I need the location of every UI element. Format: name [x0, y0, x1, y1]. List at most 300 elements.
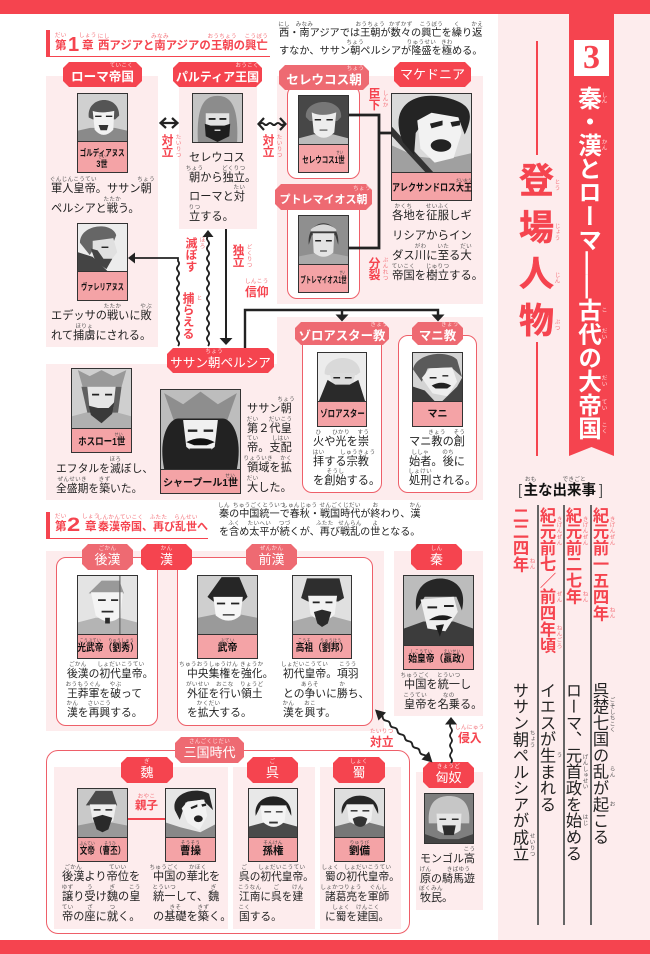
panel: Sasanian figures and religions	[46, 317, 483, 500]
text: Emperor Wu: かくだい	[197, 701, 220, 707]
text: Alexander	[392, 203, 483, 282]
badge: Three Kingdoms period: さんごくじだい	[189, 738, 230, 744]
portrait: Khosrow I	[71, 368, 132, 453]
badge: Shu	[333, 757, 385, 783]
text: Emperor Wen: ごかん	[64, 865, 82, 871]
chapter 1 intro text: きわ	[441, 40, 453, 46]
badge: Wei: ぎ	[144, 758, 150, 764]
text: Emperor Wen: う	[87, 885, 93, 891]
text: Parthia: 朝から独立。	[189, 172, 256, 184]
text: Emperor Wu: きょうか	[240, 662, 264, 668]
badge: Seleucid dynasty: セレウコス	[286, 73, 349, 87]
text: しんにゅう	[455, 725, 485, 731]
text: Mani: しょけい	[408, 469, 432, 475]
text: Sun Quan: けん	[292, 885, 304, 891]
portrait: Emperor Guangwu	[77, 575, 138, 659]
heading: chapter 1: 章	[82, 39, 94, 52]
badge: Shu: しょく	[350, 758, 368, 764]
portrait: Khosrow I: せい	[114, 432, 123, 436]
text: Liu Bei: ぐんし	[370, 885, 387, 891]
arrow: Parthia versus Seleucids	[258, 118, 286, 130]
event: 27 BC: ローマ、 元首政 を 始 める	[563, 682, 581, 861]
portrait: Ptolemy I	[298, 215, 349, 293]
arrow: faith lines to religions	[245, 310, 444, 348]
portrait: Shapur I: せい	[225, 472, 235, 478]
portrait: Emperor Gaozu: 高祖（劉邦）	[296, 642, 348, 654]
text: Emperor Wen: つ	[109, 905, 115, 911]
badge: Han: 漢	[160, 552, 173, 566]
text: Mani: 始者。後に	[409, 456, 465, 468]
panel: sidebar: せいりつ	[528, 833, 534, 857]
text: Parthia: セレウコス	[189, 152, 245, 164]
text: Emperor Gaozu: あらそ	[301, 682, 319, 688]
text: Emperor Guangwu: しょだいこうてい	[97, 662, 145, 668]
badge: Qin: しん	[431, 546, 442, 552]
arrow: independence from Seleucids	[220, 229, 232, 345]
chapter 1 intro text: にし	[278, 22, 290, 28]
portrait: Emperor Wen	[77, 788, 128, 862]
badge: Zoroastrianism: 教	[373, 329, 385, 343]
badge: Parthia: 王国	[235, 70, 259, 84]
event: 7 to 4 BC: 紀元前 七／ 前 四 年頃	[537, 507, 555, 654]
link: parent and child	[128, 793, 165, 820]
badge: Xiongnu	[423, 762, 474, 788]
portrait: Ptolemy I: プトレマイオス1世	[300, 274, 347, 284]
portrait: Emperor Gaozu: こうそ	[298, 638, 311, 642]
text: Xiongnu: こう	[464, 847, 475, 853]
panel: Parthia	[173, 62, 262, 229]
badge: Ptolemaic dynasty: ちょう	[353, 186, 371, 192]
text: Khosrow I: エフタルを滅ぼし、	[56, 463, 153, 475]
chapter 2 intro text: しん	[218, 503, 230, 509]
text: Liu Bei: 諸葛亮を軍師	[325, 891, 389, 903]
heading: chapter 2: ふたた	[150, 515, 167, 521]
badge: Han: かん	[161, 546, 172, 552]
text: Emperor Wen: 譲り受け魏の皇	[62, 891, 140, 903]
badge: Wei: 魏	[140, 764, 154, 780]
text: Zoroaster: を創始する。	[313, 475, 380, 487]
portrait: Gordian III: せい	[99, 154, 106, 158]
label: split	[367, 257, 388, 281]
text: Alexander: 帝国を樹立する。	[392, 270, 483, 282]
heading: chapter 2: 第	[55, 520, 67, 533]
box: Later Han	[56, 557, 158, 726]
label: destroy	[184, 237, 205, 272]
text: Shapur I: ササン朝	[247, 403, 292, 415]
label: conflict 1	[160, 134, 181, 158]
chapter 2 intro text: 秦の中国統一で春秋・戦国時代が終わり、漢	[219, 509, 420, 520]
panel: Qin dynasty	[394, 544, 483, 716]
panel: Seleucids, Ptolemies and Macedonia	[275, 62, 483, 304]
portrait: Alexander the Great: アレクサンドロス大王	[392, 182, 472, 194]
panel: sidebar: う	[556, 752, 562, 758]
arrow: Sasanians destroy Parthia	[202, 230, 214, 346]
text: Valerian: ほりょ	[75, 324, 93, 330]
portrait: Liu Bei: りゅうび	[350, 840, 369, 844]
heading: chapter 2: だい	[55, 514, 67, 520]
heading: chapter 1: こうぼう	[245, 34, 268, 40]
portrait: First Emperor: 始皇帝（嬴政）	[408, 654, 469, 664]
chapter 1 intro text: ちょう	[346, 40, 364, 46]
text: Alexander: せいふく	[426, 204, 449, 210]
chapter 2 intro text: ちゅうごくとういつ	[233, 503, 286, 509]
badge: Zoroastrianism: ゾロアスター	[299, 329, 373, 343]
text: Alexander: いた	[437, 244, 449, 250]
text: Xiongnu: きばゆう	[447, 867, 470, 873]
badge: Wu: 呉	[266, 764, 279, 780]
portrait: Seleucus I	[298, 95, 349, 173]
portrait: Emperor Guangwu: 光武帝（劉秀）	[77, 642, 138, 654]
chapter 2 intro text: よ	[372, 521, 378, 527]
text: Khosrow I: きず	[99, 477, 110, 483]
text: Shapur I: しはい	[272, 436, 289, 442]
text: Cao Cao	[149, 864, 231, 923]
text: Shapur I: だい	[247, 417, 258, 423]
text: Cao Cao: ぎ	[211, 885, 217, 891]
chapter 1 intro text: かえ	[471, 22, 483, 28]
panel: Xiongnu	[416, 762, 483, 910]
text: Emperor Guangwu: さいこう	[88, 701, 111, 707]
badge: Macedonia: マケドニア	[400, 66, 465, 82]
text: Zoroaster: ひ	[316, 430, 322, 436]
text: Mani	[408, 429, 476, 487]
text: Emperor Gaozu: 初代皇帝。項羽	[283, 668, 359, 680]
text: Valerian: やぶ	[140, 304, 152, 310]
badge: Wu: ご	[270, 758, 275, 764]
text: Emperor Wu	[179, 661, 273, 719]
text: Liu Bei: しょく	[332, 905, 350, 911]
box: Zoroastrianism	[302, 335, 382, 493]
badge: Parthia: パルティア	[176, 70, 235, 84]
panel: sidebar: きげんぜん	[608, 517, 614, 546]
text: Emperor Gaozu: との争いに勝ち、	[283, 688, 369, 700]
text: Alexander: ダス川に至る大	[392, 250, 472, 262]
text: Mani: そう	[453, 430, 465, 436]
badge: Xiongnu: きょうど	[437, 764, 460, 770]
badge: Manichaeism: マニ	[419, 329, 444, 343]
label: conflict 2	[261, 134, 282, 158]
text: Cao Cao: とういつ	[152, 885, 176, 891]
text: Emperor Wen: 帝の座に就く。	[62, 911, 140, 923]
text: Emperor Gaozu: 漢を興す。	[283, 707, 336, 719]
heading: chapter 1: 西アジアと南アジアの王朝の興亡	[98, 40, 268, 52]
text: Emperor Guangwu: かん	[66, 701, 78, 707]
portrait: Emperor Wen: 文帝（曹丕）	[80, 846, 125, 856]
panel: sidebar: げんしゅせい	[582, 754, 588, 789]
chapter 1 intro text: みなみ	[296, 22, 313, 28]
badge: Former Han: ぜんかん	[260, 546, 283, 552]
text: たいりつ	[370, 729, 394, 735]
text: Valerian	[51, 303, 152, 342]
portrait: Liu Bei: 劉備	[349, 844, 370, 856]
portrait: Shapur I	[160, 389, 241, 494]
chapter 1 intro text: 西・南アジアでは王朝が数々の興亡を繰り返	[279, 28, 482, 39]
text: Liu Bei: しょかつりょう	[320, 885, 362, 891]
chapter title text	[578, 86, 608, 440]
badge: Parthia: おうこく	[235, 63, 259, 69]
label: faith	[245, 278, 269, 299]
badge: Roman Empire: ていこく	[110, 63, 133, 69]
text: Shapur I: りょういき	[243, 456, 273, 462]
text: Zoroaster: しゅうきょう	[340, 450, 375, 456]
text: Alexander: かくち	[395, 204, 412, 210]
chapter 1 intro text: く	[454, 22, 460, 28]
badge: Zoroastrianism	[295, 322, 389, 345]
panel: Han dynasty	[46, 544, 384, 731]
event: 154 BC: 紀元前 一五四 年	[590, 507, 608, 621]
text: First Emperor: なの	[443, 693, 455, 699]
heading: chapter 1: だい	[55, 33, 67, 39]
box: Ptolemaic dynasty	[287, 190, 360, 299]
text: Alexander: リシアからイン	[392, 230, 472, 242]
portrait: Emperor Wen: ぶんてい	[80, 840, 95, 846]
badge: Seleucid dynasty: ちょう	[347, 66, 364, 72]
portrait: Gordian III	[77, 93, 128, 173]
heading: main events	[518, 476, 603, 499]
text: Khosrow I: ぜんせいき	[57, 477, 87, 483]
text: Khosrow I: 全盛期を築いた。	[56, 483, 142, 495]
portrait: First Emperor: しこうてい	[410, 648, 432, 654]
chapter 1 intro text: かずかず	[389, 22, 413, 28]
badge: Ptolemaic dynasty: 朝	[356, 194, 368, 206]
ribbon: chapter title: だい	[600, 375, 606, 387]
text: Alexander: がわ	[415, 244, 426, 250]
badge: Later Han: ごかん	[99, 546, 116, 552]
chapter number	[574, 40, 609, 76]
label: capture	[181, 292, 202, 339]
text: どくりつ	[246, 244, 252, 268]
event: 7 to 4 BC	[537, 507, 562, 812]
portrait: Shapur I: シャープール1世	[163, 478, 238, 488]
badge: Sasanian Persia: ササン ペルシア	[170, 356, 271, 370]
text: Gordian III: ペルシアと戦う。	[51, 203, 140, 215]
text: Cao Cao: 統一して、魏	[153, 891, 219, 903]
event: 154 BC: 呉楚七国 の 乱 が 起 こる	[590, 682, 608, 845]
text: Alexander: ていこく	[392, 264, 415, 270]
text: First Emperor	[400, 672, 482, 711]
text: Zoroaster: ひかり	[332, 430, 350, 436]
text: Valerian: たたか	[104, 304, 121, 310]
text: Cao Cao: かほく	[189, 865, 207, 871]
chapter 1 intro text: こうぼう	[420, 22, 443, 28]
text: Parthia: ちょう	[186, 166, 203, 172]
panel: sidebar: らん	[608, 766, 614, 778]
panel: sidebar: きげんぜん	[556, 517, 562, 546]
text: Emperor Guangwu: やぶ	[110, 682, 121, 688]
event: AD 224: 二二四 年	[510, 507, 528, 572]
text: Emperor Wen: ざ	[87, 905, 93, 911]
text: Emperor Wu: 外征を行い領土	[187, 688, 263, 700]
box: Seleucid dynasty	[287, 85, 360, 179]
panel: sidebar: ごそしちこく	[608, 697, 614, 732]
chapter title text: 秦 ・ 漢 とローマ—— 古 代 の 大 帝 国	[574, 86, 600, 440]
text: Khosrow I: ほろ	[109, 457, 121, 463]
heading: characters: じょう	[554, 223, 560, 241]
arrow: Xiongnu invade Qin	[445, 717, 457, 763]
portrait: Emperor Wu	[197, 575, 258, 659]
text: Sun Quan: 呉の初代皇帝。	[239, 871, 314, 883]
portrait: Cao Cao	[165, 788, 216, 862]
badge: Ptolemaic dynasty	[275, 184, 372, 210]
text: Sun Quan: こく	[238, 905, 250, 911]
portrait: Emperor Wen: そうひ	[104, 840, 116, 846]
heading: chapter 2: らんせい	[174, 515, 198, 521]
portrait: Emperor Gaozu	[292, 575, 352, 659]
heading: chapter 1: にし	[98, 34, 110, 40]
portrait: Emperor Wu: ぶてい	[220, 638, 235, 642]
text: と	[196, 295, 202, 301]
heading: chapter 1: おうちょう	[207, 34, 237, 40]
badge: Zoroastrianism: きょう	[370, 322, 388, 328]
portrait: Emperor Guangwu: りゅうしゅう	[108, 638, 134, 642]
label: vassals: 臣下	[367, 87, 381, 111]
event: AD 224: ササン 朝 ペルシアが 成立	[510, 682, 528, 861]
text: Valerian: エデッサの戦いに敗	[51, 310, 152, 322]
panel: sidebar: ねんごろ	[556, 626, 562, 649]
panel: Three Kingdoms	[46, 737, 410, 934]
text: Parthia: ローマと対	[189, 191, 245, 203]
text: First Emperor: とういつ	[437, 673, 461, 679]
connector: Alexander to successors	[349, 115, 392, 248]
text: Parthia: りつ	[189, 205, 201, 211]
text: Sun Quan	[238, 864, 314, 923]
text: First Emperor: 中国を統一し	[404, 679, 471, 691]
badge: Shu: 蜀	[352, 764, 366, 780]
heading: chapter 2: しんかんていこく	[97, 515, 143, 521]
chapter 2 intro text: せんごくじだい	[319, 503, 361, 509]
chapter 2 intro text: せんらん	[338, 521, 362, 527]
portrait: Sun Quan: そんけん	[263, 840, 283, 844]
text: Emperor Wen: てい	[62, 905, 73, 911]
text: Cao Cao: の基礎を築く。	[153, 911, 231, 923]
badge: Wu	[247, 757, 298, 783]
heading: characters: ぶつ	[554, 319, 560, 331]
text: Gordian III: たたか	[103, 197, 121, 203]
panel: sidebar: ちょう	[528, 730, 534, 748]
text: First Emperor: ちゅうごく	[400, 673, 430, 679]
label: conflict 3: 対立	[370, 735, 394, 749]
event: 27 BC	[563, 507, 588, 861]
badge: Manichaeism	[412, 322, 463, 345]
badge: Han	[141, 544, 192, 570]
chapter 2 intro text: たいへい	[248, 521, 271, 527]
chapter 2 intro text: お	[372, 503, 378, 509]
text: Emperor Guangwu: 漢を再興する。	[67, 707, 143, 719]
label: faith: 信仰	[245, 285, 269, 299]
event: 27 BC: 紀元前 二七 年	[563, 507, 581, 605]
portrait: Xiongnu horseman	[424, 793, 474, 844]
label: invasion	[455, 724, 485, 745]
text: Xiongnu: モンゴル高	[420, 853, 475, 865]
heading: chapter 1	[46, 30, 270, 57]
badge: Later Han: 後漢	[94, 552, 120, 566]
badge: Roman Empire: 帝国	[109, 70, 134, 84]
portrait: First Emperor: えいせい	[443, 648, 460, 654]
text: Emperor Gaozu: かん	[282, 701, 294, 707]
text: Parthia: どくりつ	[222, 166, 246, 172]
text: Mani: マニ教の創	[409, 436, 465, 448]
panel: sidebar: おも	[525, 477, 537, 483]
badge: Ptolemaic dynasty: プトレマイオス	[280, 194, 356, 206]
heading: chapter 1: 第	[55, 39, 67, 52]
badge: Manichaeism: きょう	[441, 322, 459, 328]
event: 7 to 4 BC: イエスが 生 まれる	[537, 682, 555, 812]
chapter 2 intro text: ふく	[228, 521, 240, 527]
ribbon: chapter title: だい	[600, 328, 606, 340]
portrait: Emperor Guangwu: こうぶてい	[79, 638, 101, 642]
text: Xiongnu: げん	[420, 867, 431, 873]
heading: chapter 1: みなみ	[151, 34, 169, 40]
text: Cao Cao: きず	[197, 905, 209, 911]
ribbon: chapter title: こく	[600, 422, 606, 434]
heading: chapter 2: 2	[67, 515, 80, 536]
label: conflict 1: 対立	[160, 134, 174, 158]
box: Former Han	[177, 557, 373, 726]
ribbon: chapter title: かん	[600, 139, 606, 151]
text: Valerian: れて捕虜にされる。	[51, 330, 151, 342]
ribbon: chapter title: こ	[600, 307, 606, 313]
text: Emperor Wen: 後漢より帝位を	[62, 871, 140, 883]
text: Sun Quan: 国する。	[239, 911, 282, 923]
text: Mani: きょう	[428, 430, 446, 436]
text: Zoroaster	[313, 429, 380, 487]
badge: Later Han	[82, 544, 133, 570]
portrait: Seleucus I: セレウコス1世	[302, 154, 345, 164]
text: Xiongnu	[419, 846, 475, 904]
text: Liu Bei: けんこく	[356, 905, 380, 911]
portrait: Liu Bei	[334, 788, 385, 862]
badge: Parthia	[173, 62, 262, 87]
text: Emperor Gaozu: こうう	[339, 662, 357, 668]
portrait: Valerian	[77, 223, 128, 301]
portrait: Cao Cao: 曹操	[180, 844, 201, 856]
badge: Seleucid dynasty	[279, 65, 369, 90]
panel: sidebar: ぜん	[556, 591, 562, 603]
portrait: Zoroaster	[317, 352, 367, 427]
badge: Xiongnu: 匈奴	[435, 770, 462, 784]
text: First Emperor: 皇帝を名乗る。	[404, 699, 482, 711]
text: Alexander: 各地を征服しギ	[392, 210, 472, 222]
text: ぶんれつ	[382, 257, 388, 281]
badge: Sasanian Persia: 朝	[208, 356, 220, 370]
text: Cao Cao: 中国の華北を	[153, 871, 220, 883]
panel: sidebar	[498, 14, 650, 940]
event: 154 BC	[590, 507, 616, 845]
text: たいりつ	[174, 134, 180, 158]
portrait: Zoroaster: ゾロアスター	[320, 408, 364, 420]
portrait: Sun Quan: 孫権	[262, 844, 284, 856]
text: Cao Cao: ちゅうごく	[149, 865, 179, 871]
heading: chapter 2: 章	[85, 520, 97, 533]
heading: chapter 1: 1	[68, 34, 79, 56]
top red band	[0, 0, 650, 14]
text: Emperor Guangwu: 王莽軍を破って	[67, 688, 142, 700]
label: split: 分裂	[367, 257, 381, 281]
panel: sidebar: ねん	[582, 591, 588, 603]
badge: Former Han	[246, 544, 297, 570]
chapter number: 3	[583, 39, 600, 76]
portrait: Cao Cao: そうそう	[181, 840, 200, 844]
text: Zoroaster: はい	[313, 450, 324, 456]
text: Khosrow I	[56, 456, 153, 495]
badge: Sasanian Persia	[167, 348, 274, 373]
portrait: Sun Quan	[248, 788, 298, 862]
text: Gordian III	[50, 176, 155, 215]
arrow: Rome versus Parthia	[160, 118, 178, 128]
badge: Seleucid dynasty: 朝	[349, 73, 362, 87]
portrait: Emperor Wu: 武帝	[218, 642, 238, 654]
text: Alexander: だい	[460, 244, 472, 250]
